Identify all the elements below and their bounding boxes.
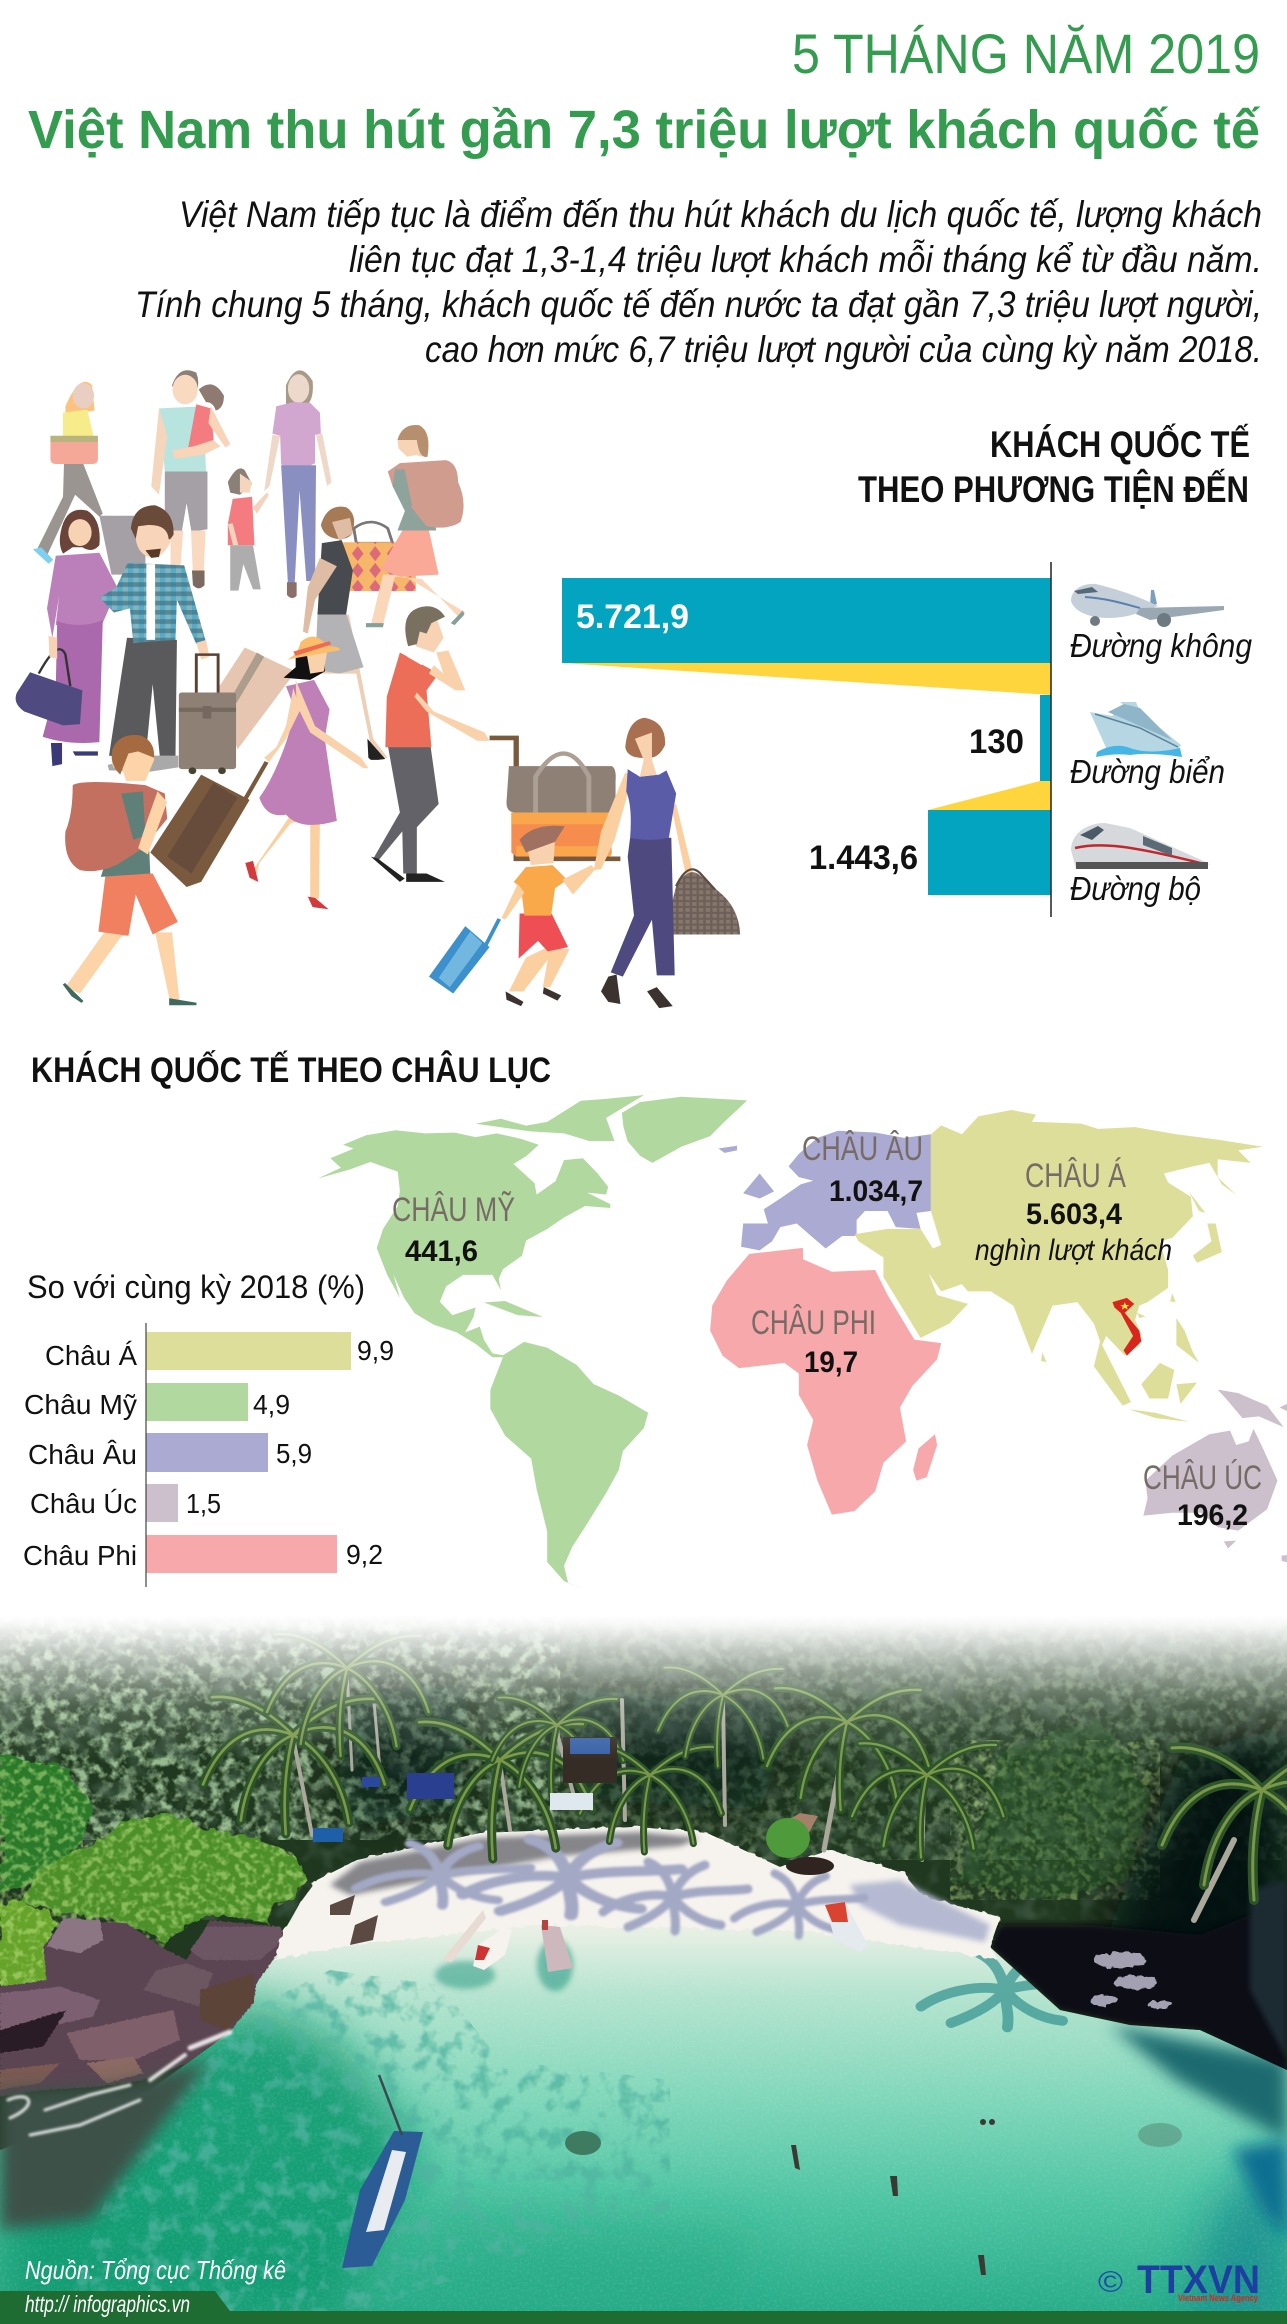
label: air: Đường không <box>1070 627 1253 664</box>
source: Nguồn: Tổng cục Thống kê <box>25 2255 286 2285</box>
logo: TTXVN: TTXVN <box>1137 2258 1260 2302</box>
map label: America: CHÂU MỸ <box>392 1191 515 1229</box>
map label: Asia: CHÂU Á <box>1025 1157 1126 1195</box>
bar chart: growth by continent: 5,9 <box>276 1438 312 1469</box>
icon: train <box>1071 823 1208 869</box>
map: Africa <box>710 1248 941 1515</box>
man in plaid shirt <box>99 505 209 772</box>
basket and backpack traveller <box>343 425 465 627</box>
bright green bushes <box>0 1720 1150 1992</box>
bar: sea <box>1040 695 1051 781</box>
bar chart: growth by continent: Châu Á <box>45 1340 137 1371</box>
funnel bar chart: transport <box>562 562 1051 917</box>
map label: Africa: CHÂU PHI <box>751 1304 876 1342</box>
footer band <box>0 2291 1287 2324</box>
heading: by continent: KHÁCH QUỐC TẾ THEO CHÂU LỤC <box>31 1050 551 1090</box>
map label: Oceania <box>1143 1459 1262 1532</box>
woman in purple with handbag <box>16 510 117 766</box>
bar chart: growth by continent <box>23 1323 394 1587</box>
logo: TTXVN: Vietnam News Agency <box>1178 2293 1258 2303</box>
dark shallows and surf <box>0 2032 230 2230</box>
faded back row of travellers <box>33 370 332 598</box>
map: Asia <box>855 1110 1263 1422</box>
map label: Oceania: 196,2 <box>1177 1499 1248 1532</box>
backpack boy and brown suitcase <box>64 735 267 1004</box>
heading: compared with 2018: So với cùng kỳ 2018 (%) <box>27 1269 365 1305</box>
logo: TTXVN: © <box>1098 2266 1123 2299</box>
map label: Africa: 19,7 <box>804 1346 858 1379</box>
label: sea: Đường biển <box>1070 753 1225 790</box>
bar: air <box>562 578 1051 663</box>
map label: Europe: CHÂU ÂU <box>802 1130 923 1168</box>
map label: Asia <box>975 1157 1172 1267</box>
sand <box>275 1827 1000 1960</box>
map label: Asia: 5.603,4 <box>1026 1198 1122 1231</box>
trolley with bags <box>490 738 620 859</box>
top white fade <box>0 1600 1287 1760</box>
map label: Asia: nghìn lượt khách <box>975 1234 1172 1267</box>
world map <box>318 1095 1287 1590</box>
illustration: travellers with luggage <box>16 370 740 1008</box>
bar chart: growth by continent: 9,9 <box>357 1335 394 1366</box>
photo: tropical beach cove <box>0 1600 1287 2324</box>
bar chart: growth by continent: Châu Âu <box>28 1439 137 1470</box>
icon: airplane <box>1071 584 1224 627</box>
swimmers <box>791 2119 995 2275</box>
icon: cruise ship <box>1090 702 1182 757</box>
woman in dark top <box>303 507 388 760</box>
boats <box>342 1902 868 2268</box>
funnel bar chart: transport: 130 <box>969 723 1024 761</box>
shade near tree line <box>330 1832 700 1895</box>
bar chart: growth by continent: Châu Phi <box>23 1540 137 1571</box>
man on phone pushing trolley <box>371 606 490 882</box>
map label: Africa <box>751 1304 876 1379</box>
woman in blue holding boy's hand <box>594 718 740 1008</box>
woman in lilac dress with hat <box>245 637 368 909</box>
bar chart: growth by continent: 1,5 <box>186 1488 221 1519</box>
funnel bar chart: transport: 1.443,6 <box>809 839 918 877</box>
map: Europe <box>718 1131 931 1250</box>
map label: America <box>392 1191 515 1268</box>
map: Greenland <box>622 1097 747 1163</box>
forest <box>0 1600 1287 2150</box>
label: road: Đường bộ <box>1070 870 1201 907</box>
palm shadow on water <box>921 1952 1095 2027</box>
forest texture <box>0 1600 1287 2080</box>
bar chart: growth by continent: Châu Úc <box>30 1488 137 1519</box>
wheeled suitcases behind the man <box>179 647 296 774</box>
heading: by means of transport <box>858 423 1250 510</box>
boy in orange with blue suitcase <box>429 826 595 1006</box>
dark shade under the right cliff <box>1110 2025 1287 2140</box>
water <box>0 1880 1287 2324</box>
rocks <box>0 1918 287 2097</box>
map: Americas <box>318 1095 648 1590</box>
bar: road <box>928 810 1051 895</box>
palm crowns <box>203 1634 1287 1900</box>
map label: America: 441,6 <box>405 1235 478 1268</box>
bar chart: growth by continent: 4,9 <box>253 1389 290 1420</box>
beach huts <box>313 1737 834 1875</box>
website: http:// infographics.vn <box>25 2291 190 2317</box>
map label: Europe <box>802 1130 923 1208</box>
right tree clump <box>960 1720 1150 1900</box>
palm shadows on sand <box>356 1840 864 1936</box>
intro paragraph <box>135 194 1262 370</box>
map: Vietnam <box>1112 1298 1141 1356</box>
map: Oceania <box>1143 1390 1287 1562</box>
sunlit rocks on the right shore <box>1091 1952 1172 2009</box>
map label: Europe: 1.034,7 <box>829 1175 923 1208</box>
bar chart: growth by continent: Châu Mỹ <box>24 1389 137 1420</box>
reefs <box>60 1970 1182 2324</box>
bar chart: growth by continent: 9,2 <box>346 1539 383 1570</box>
palm trunks <box>293 1670 1234 1920</box>
funnel bar chart: transport: 5.721,9 <box>576 598 689 636</box>
title: headline: Việt Nam thu hút gần 7,3 triệu lượt khách quốc tế <box>28 100 1261 160</box>
